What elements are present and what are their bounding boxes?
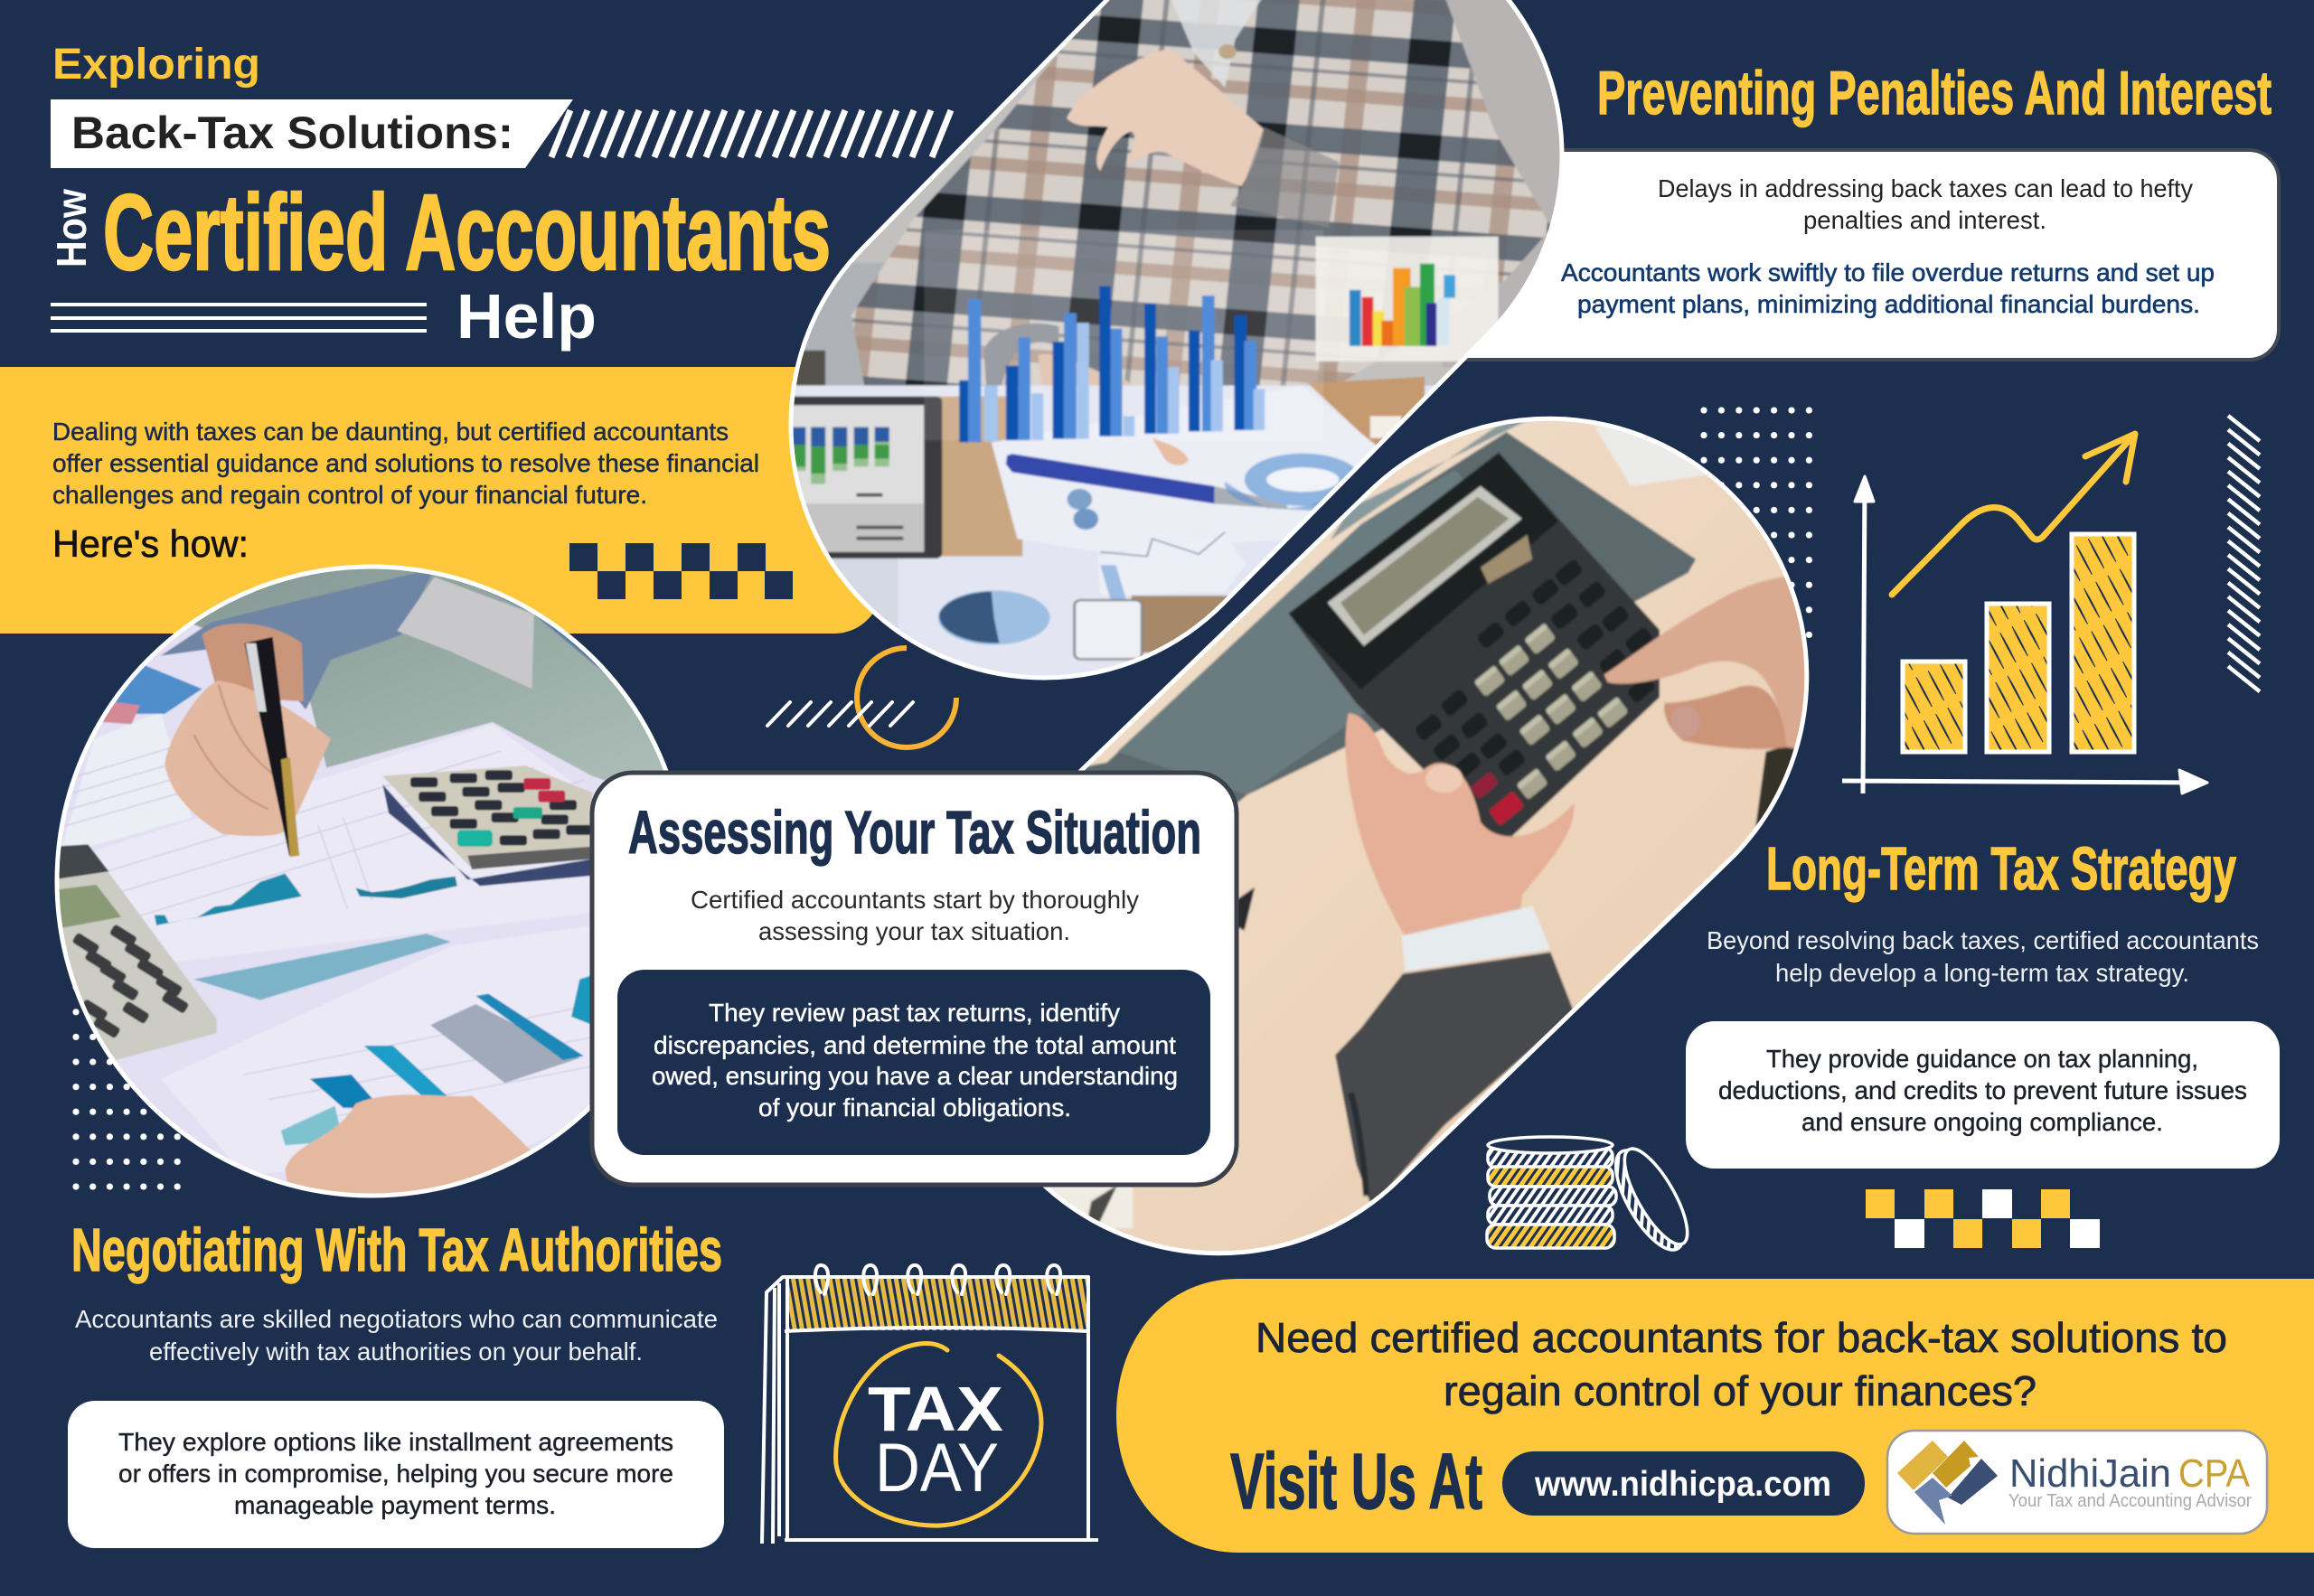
intro text: offer essential guidance and solutions to resolve these financial [52,449,759,477]
intro text: challenges and regain control of your financial future. [52,481,647,509]
body text [1707,926,2259,987]
inner text: discrepancies, and determine the total amount [654,1031,1176,1059]
triple rule [51,305,427,331]
white box [68,1401,724,1548]
box text: manageable payment terms. [234,1491,556,1519]
calendar outline [762,1277,1098,1544]
panel: call to action [1116,1279,2314,1553]
panel: long-term tax strategy [1686,835,2280,1169]
heading: Negotiating With Tax Authorities [71,1216,722,1284]
photo: accountant with chart overlay [788,0,1564,680]
question text: regain control of your finances? [1444,1367,2037,1414]
panel: negotiating with tax authorities [68,1216,724,1548]
body text: Beyond resolving back taxes, certified accountants [1707,926,2259,954]
inner text [652,999,1178,1122]
heading: Back-Tax Solutions: Back-Tax Solutions: [71,108,513,158]
photo: hands on calculator [1043,416,1810,1256]
heading: Certified Accountants: Certified Accountants [103,173,831,293]
icon: hatching stripes right [2228,416,2260,691]
question text: Need certified accountants for back-tax solutions to [1256,1314,2227,1361]
panel: yellow intro band [0,367,881,634]
logo wordmark: NidhiJain [2009,1451,2171,1496]
body text: Accountants work swiftly to file overdue returns and set up [1561,258,2215,286]
body text: payment plans, minimizing additional financial burdens. [1577,290,2200,318]
white outline [961,418,1807,1253]
heading: Assessing Your Tax Situation [628,799,1201,867]
chart: growth bars with arrow [1842,434,2207,793]
body text [75,1305,718,1366]
heading: Exploring: Exploring [52,41,260,89]
trend arrow [1892,434,2135,595]
body text: Certified accountants start by thoroughly [691,886,1139,914]
body text: effectively with tax authorities on your behalf. [149,1338,643,1366]
calendar rings [815,1265,1060,1294]
panel: preventing penalties [1311,59,2279,360]
photo: pen and calculators on charts [36,560,687,1216]
box text: They explore options like installment agreements [118,1428,673,1456]
panel: assessing your tax situation [592,773,1237,1185]
yellow band [1116,1279,2314,1553]
white box [1686,1021,2280,1169]
body text: help develop a long-term tax strategy. [1775,959,2189,987]
box text: and ensure ongoing compliance. [1801,1108,2163,1136]
icon: coin stack [1487,1137,1698,1260]
body text: assessing your tax situation. [758,917,1070,945]
box text [1718,1045,2247,1136]
inner text: owed, ensuring you have a clear understanding [652,1062,1178,1090]
body text [691,886,1139,945]
diagonal stripes [551,110,951,157]
decorative dots left [68,950,186,1199]
question text [1256,1314,2227,1414]
white outline [57,567,686,1196]
logo card [1887,1431,2267,1534]
body text: Accountants are skilled negotiators who can communicate [75,1305,718,1333]
axes [1842,476,2207,793]
white outline [791,0,1562,678]
white title banner [51,99,573,168]
box text: They provide guidance on tax planning, [1766,1045,2198,1073]
heading: How (rotated): How [48,189,95,268]
box text: or offers in compromise, helping you secure more [118,1460,673,1488]
calendar header hatching [787,1279,1088,1330]
box text [118,1428,673,1519]
decorative dots top right [1695,398,1818,647]
title block [48,41,951,352]
body text: penalties and interest. [1803,206,2046,234]
logo mark [1897,1441,1998,1525]
inner text: of your financial obligations. [758,1094,1071,1122]
navy inner box [617,970,1210,1155]
logo tagline: Your Tax and Accounting Advisor [2008,1491,2252,1511]
visit us at: Visit Us At [1230,1438,1482,1526]
box text: deductions, and credits to prevent future issues [1718,1076,2247,1104]
intro text: Dealing with taxes can be daunting, but certified accountants [52,418,729,446]
logo card: CPA [2178,1451,2251,1496]
white box [1311,150,2279,360]
TAX: TAX [868,1374,1003,1444]
body text: Delays in addressing back taxes can lead to hefty [1658,174,2193,202]
circle around text [836,1344,1041,1526]
inner text: They review past tax returns, identify [709,999,1120,1027]
icon: tax day calendar [762,1265,1098,1544]
decorative arc and stripes [767,648,956,747]
checker pattern: navy [569,543,793,599]
url pill [1502,1451,1865,1516]
DAY: DAY [875,1430,999,1507]
body text [1561,174,2215,318]
heading: Here's how: Here's how: [52,522,249,565]
url pill: www.nidhicpa.com [1534,1465,1831,1504]
bars [1903,534,2134,752]
card [592,773,1237,1185]
heading: Help: Help [456,281,597,352]
intro text [52,418,759,509]
checker pattern: yellow and white [1866,1189,2100,1248]
